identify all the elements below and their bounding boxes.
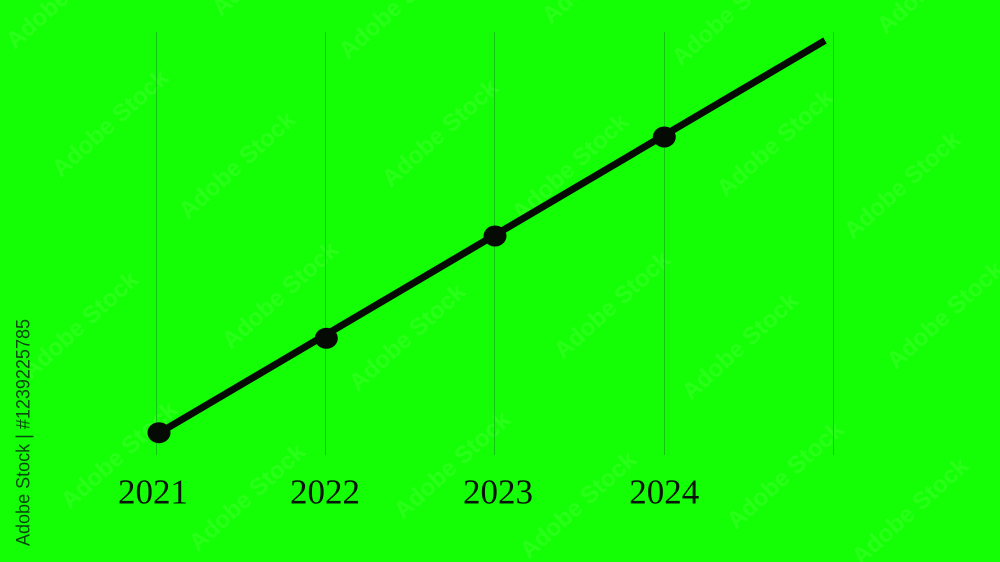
watermark pattern: Adobe Stock xyxy=(56,396,183,514)
data point: 2023 xyxy=(484,226,506,246)
watermark pattern: Adobe Stock xyxy=(344,278,471,396)
watermark pattern: Adobe Stock xyxy=(677,287,804,405)
data point: 2022 xyxy=(315,328,338,349)
watermark pattern: Adobe Stock xyxy=(184,438,311,556)
data point: 2024 xyxy=(653,126,676,148)
watermark pattern: Adobe Stock xyxy=(712,84,839,202)
watermark pattern: Adobe Stock xyxy=(507,108,634,226)
x-axis year labels xyxy=(118,472,699,512)
watermark pattern: Adobe Stock xyxy=(174,106,301,224)
watermark pattern: Adobe Stock xyxy=(389,406,516,524)
watermark pattern: Adobe Stock xyxy=(549,246,676,364)
stock id side label: Adobe Stock | #1239225785 xyxy=(14,319,34,546)
watermark pattern: Adobe Stock xyxy=(722,416,849,534)
watermark pattern: Adobe Stock xyxy=(47,64,174,182)
watermark pattern: Adobe Stock xyxy=(515,446,642,562)
x-axis year labels: 2021 xyxy=(118,472,188,512)
watermark pattern: Adobe Stock xyxy=(839,126,966,244)
trend line xyxy=(159,40,825,433)
x-axis year labels: 2023 xyxy=(463,472,533,512)
x-axis year labels: 2024 xyxy=(629,472,699,512)
data point: 2021 xyxy=(148,422,170,443)
watermark pattern: Adobe Stock xyxy=(217,236,344,354)
watermark pattern: Adobe Stock xyxy=(17,266,144,384)
x-axis year labels: 2022 xyxy=(290,472,360,512)
watermark pattern: Adobe Stock xyxy=(377,74,504,192)
